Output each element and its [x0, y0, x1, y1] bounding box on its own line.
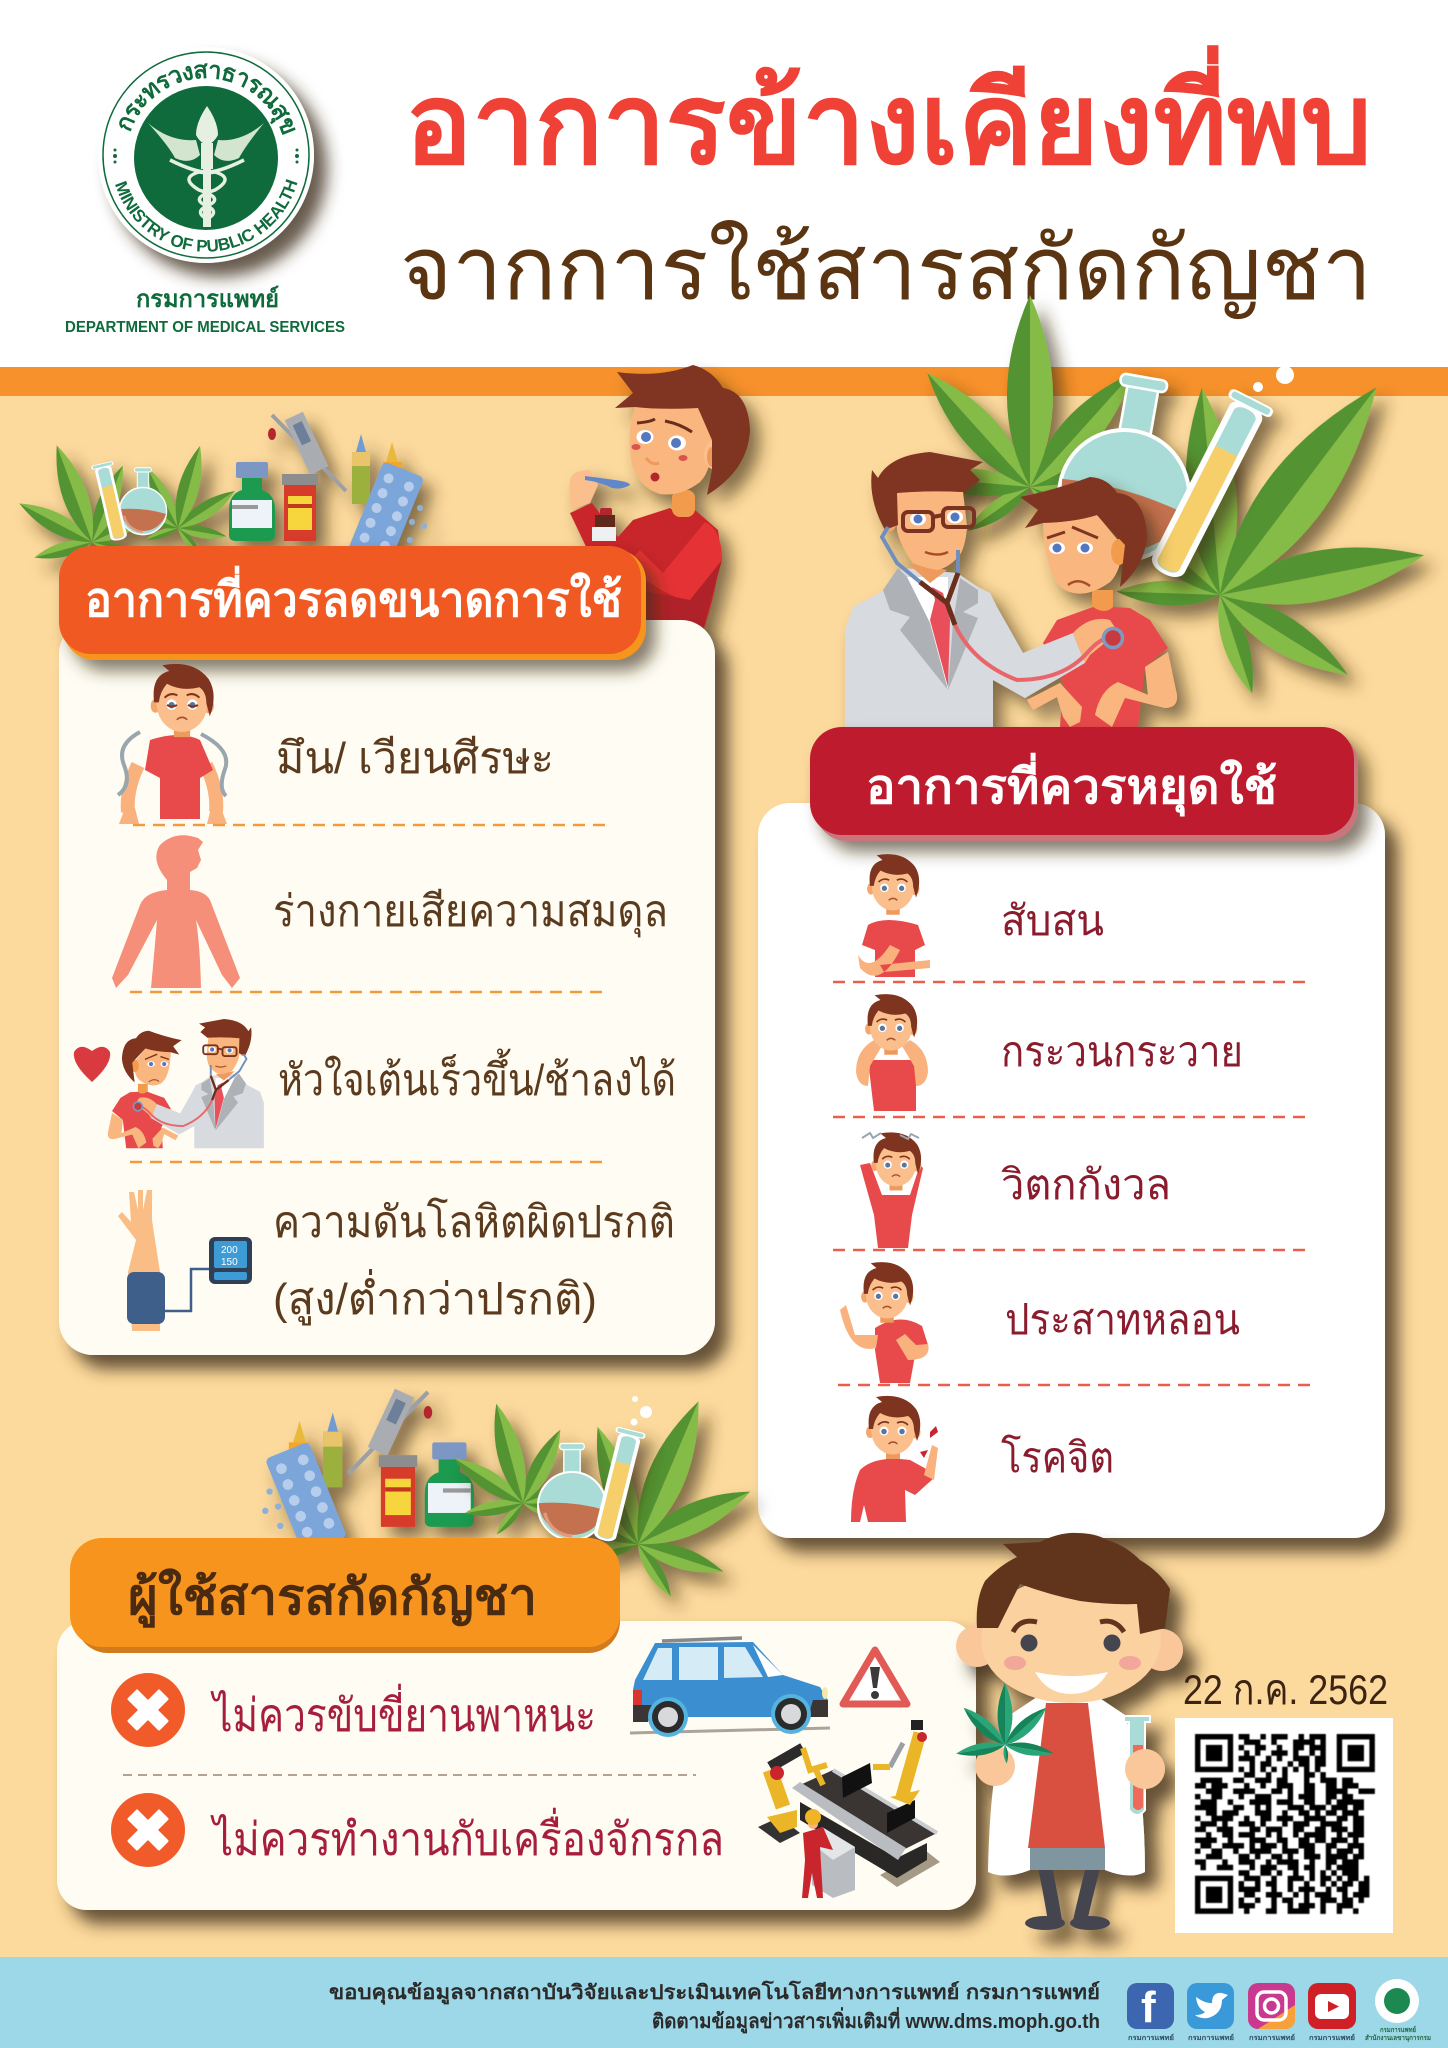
illustration: doctor examining patient	[845, 452, 1177, 727]
illustration: medicines lower	[262, 1389, 474, 1554]
icon: facebook: f	[1141, 1983, 1156, 2032]
footer text 2: ติดตามข้อมูลข่าวสารเพิ่มเติมที่ www.dms.moph.go.th	[652, 2006, 1100, 2035]
icon labels: กรมการแพทย์	[1128, 2033, 1174, 2042]
footer text 1: ขอบคุณข้อมูลจากสถาบันวิจัยและประเมินเทคโนโลยีทางการแพทย์ กรมการแพทย์	[329, 1980, 1100, 2006]
panel: reduce dose	[59, 546, 715, 1355]
row text 2: กระวนกระวาย	[1001, 1028, 1243, 1075]
header text: ผู้ใช้สารสกัดกัญชา	[128, 1568, 537, 1628]
header pill	[70, 1538, 620, 1653]
row text 4: ความดันโลหิตผิดปรกติ	[273, 1197, 675, 1247]
icon: facebook	[1127, 1983, 1174, 2032]
department name thai: กรมการแพทย์	[136, 285, 279, 313]
icon labels: กรมการแพทย์	[1188, 2033, 1234, 2042]
header text: อาการที่ควรลดขนาดการใช้	[85, 565, 622, 627]
icon: agitated boy	[856, 994, 928, 1111]
card	[758, 803, 1385, 1538]
illustration: factory machinery	[758, 1720, 940, 1898]
header pill	[810, 727, 1358, 841]
illustration: cannabis leaves top right	[914, 292, 1448, 746]
panel: cannabis extract users	[57, 1538, 976, 1910]
panel: stop use	[758, 727, 1385, 1538]
icon: body silhouette	[112, 835, 240, 988]
warning text 2: ไม่ควรทำงานกับเครื่องจักรกล	[210, 1807, 724, 1865]
icon: confused boy	[858, 854, 930, 977]
illustration: medicines	[229, 412, 427, 567]
white header area	[0, 0, 1448, 367]
illustration: boy taking medicine	[569, 365, 750, 640]
icon: blood pressure monitor	[118, 1190, 252, 1331]
icon: blood pressure monitor: 200	[221, 1245, 238, 1256]
icon labels: กรมการแพทย์	[1380, 2025, 1416, 2034]
icon: blood pressure monitor: 150	[221, 1257, 238, 1268]
icon: doctor and patient	[74, 1019, 264, 1148]
icon labels: กรมการแพทย์	[1249, 2033, 1295, 2042]
icon: twitter	[1187, 1983, 1234, 2029]
icon: anxious boy	[860, 1132, 923, 1248]
icon: instagram	[1248, 1983, 1295, 2029]
icon labels: กรมการแพทย์	[1309, 2033, 1355, 2042]
title line 2: จากการใช้สารสกัดกัญชา	[400, 219, 1372, 320]
icon: small logo	[1375, 1979, 1419, 2023]
department name english: DEPARTMENT OF MEDICAL SERVICES	[65, 319, 345, 336]
logo: ministry of public health: กระทรวงสาธารณสุข	[119, 63, 296, 135]
illustration: leaves lower	[436, 1365, 785, 1619]
footer bar	[0, 1957, 1448, 2048]
QR code	[1175, 1718, 1393, 1933]
icon labels: สำนักงานเลขานุการกรม	[1365, 2034, 1431, 2042]
logo: ministry of public health: MINISTRY OF PUBLIC HEALTH	[115, 179, 298, 252]
illustration: smiling kid scientist	[955, 1533, 1183, 1930]
row text 4b: (สูง/ต่ำกว่าปรกติ)	[273, 1268, 597, 1326]
row text 2: ร่างกายเสียความสมดุล	[273, 887, 668, 938]
illustration: small leaves and flask group	[0, 424, 250, 589]
illustration: large flask	[1049, 366, 1209, 570]
icon: cross 2	[111, 1793, 185, 1867]
icon: hallucinating boy	[840, 1262, 929, 1383]
date: 22 ก.ค. 2562	[1183, 1666, 1388, 1713]
illustration: flask and tube lower	[538, 1427, 645, 1544]
icon: warning triangle	[843, 1650, 907, 1704]
row text 1: สับสน	[1001, 897, 1104, 944]
orange band	[0, 367, 1448, 396]
row text 5: โรคจิต	[1001, 1433, 1114, 1481]
warning text 1: ไม่ควรขับขี่ยานพาหนะ	[210, 1683, 596, 1741]
icon: boy with psychosis	[851, 1396, 938, 1522]
bubbles lower	[630, 1396, 652, 1426]
icon: dizzy boy	[118, 664, 227, 824]
illustration: car	[630, 1638, 830, 1737]
card	[59, 620, 715, 1355]
icon labels	[1128, 2025, 1431, 2042]
title line 1: อาการข้างเคียงที่พบ	[405, 45, 1372, 187]
illustration: large test tube	[1144, 389, 1273, 584]
row text 3: หัวใจเต้นเร็วขึ้น/ช้าลงได้	[278, 1048, 676, 1105]
row text 4: ประสาทหลอน	[1005, 1296, 1240, 1343]
icon: youtube	[1308, 1983, 1356, 2029]
header text: อาการที่ควรหยุดใช้	[866, 752, 1277, 817]
icon: cross 1	[111, 1673, 185, 1747]
logo: ministry of public health	[98, 48, 340, 290]
card	[57, 1621, 976, 1910]
bubbles	[1253, 342, 1294, 392]
row text 3: วิตกกังวล	[1001, 1161, 1171, 1208]
header pill	[59, 546, 646, 660]
row text 1: มึน/ เวียนศีรษะ	[276, 734, 554, 783]
